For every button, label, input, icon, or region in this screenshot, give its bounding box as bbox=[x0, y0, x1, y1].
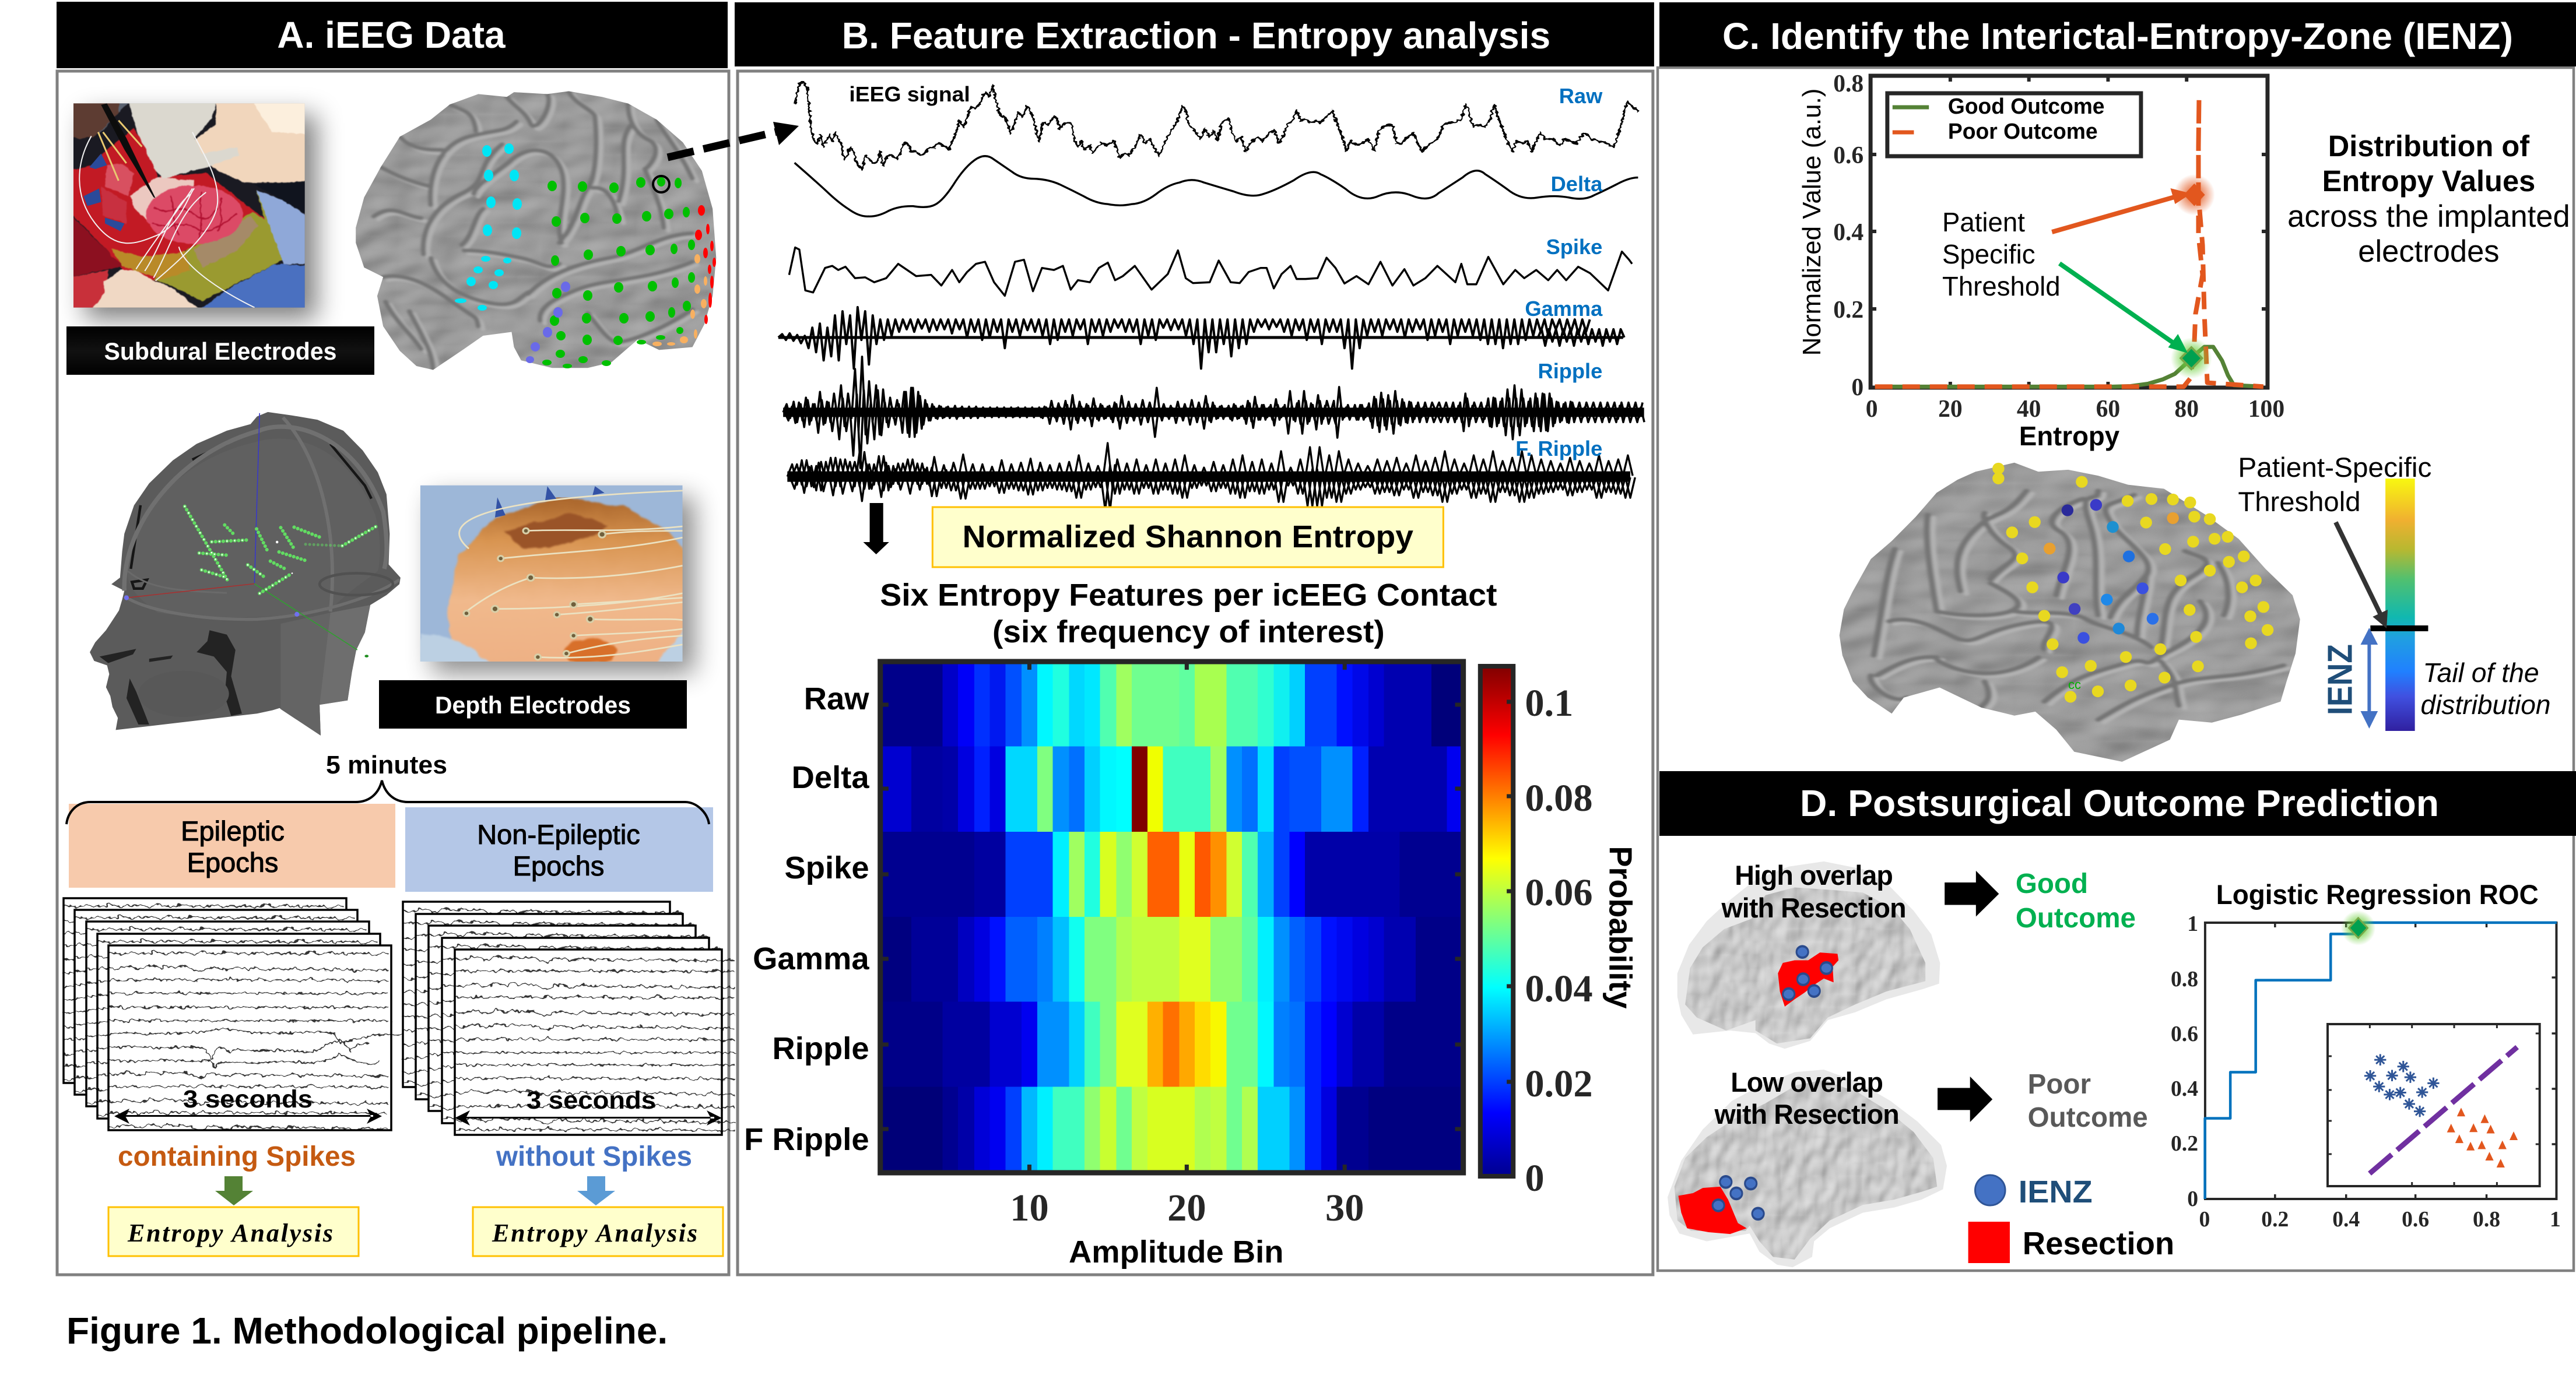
marker glow: operating point bbox=[2341, 910, 2375, 945]
ROC x labels: 1 bbox=[2550, 1207, 2561, 1232]
text: Poor Outcome bbox=[2028, 1069, 2148, 1133]
electrodes: yellow bbox=[1992, 463, 2273, 702]
x tick labels: 100 bbox=[2248, 396, 2284, 423]
box: Entropy Analysis right: Entropy Analysis bbox=[492, 1219, 697, 1247]
panel: C. Identify the IENZ bbox=[1659, 2, 2576, 762]
arrow: black down bbox=[864, 503, 889, 554]
text: Distribution of Entropy Values: Distribution of bbox=[2328, 129, 2529, 163]
text: Low overlap with Resection bbox=[1714, 1067, 1900, 1130]
legend: IENZ bbox=[1975, 1174, 2093, 1209]
box: Epileptic Epochs bbox=[69, 804, 395, 888]
legend: Resection: Resection bbox=[2023, 1225, 2174, 1261]
colorbar tick labels: 0.02 bbox=[1525, 1063, 1593, 1105]
text: containing Spikes: containing Spikes bbox=[118, 1141, 356, 1172]
text: without Spikes: without Spikes bbox=[496, 1141, 692, 1172]
text: Distribution of Entropy Values: across the implanted bbox=[2287, 199, 2570, 234]
trace: fast ripple bbox=[787, 443, 1635, 510]
ROC frame bbox=[2205, 923, 2556, 1199]
ROC x labels bbox=[2199, 1207, 2561, 1232]
panel D contents bbox=[1714, 860, 2561, 1263]
stacked spike epochs bbox=[64, 898, 404, 1130]
text: Poor Outcome: Outcome bbox=[2028, 1102, 2148, 1133]
legend: Poor Outcome bbox=[1948, 119, 2098, 144]
text: Probability: Probability bbox=[1602, 846, 1638, 1008]
arrow: blue down bbox=[577, 1176, 615, 1205]
label: Raw: Raw bbox=[1559, 84, 1603, 108]
resection: red frontal bbox=[1678, 1187, 1747, 1234]
ROC curve bbox=[2205, 923, 2557, 1199]
text: 5 minutes: 5 minutes bbox=[326, 751, 447, 779]
x tick labels bbox=[1866, 396, 2284, 423]
marker: good threshold bbox=[2181, 347, 2202, 369]
ROC y labels: 0 bbox=[2187, 1187, 2198, 1211]
heatmap x tick labels: 20 bbox=[1167, 1187, 1206, 1229]
axis label: Normalized Value: Normalized Value (a.u.) bbox=[1798, 89, 1826, 356]
box: Entropy Analysis left bbox=[108, 1207, 359, 1256]
brain with subdural electrodes bbox=[356, 92, 716, 373]
chart: entropy distribution bbox=[1798, 71, 2284, 451]
colorbar tick labels: 0.04 bbox=[1525, 968, 1593, 1010]
heatmap row labels: Spike bbox=[785, 850, 869, 885]
heat row: F Ripple bbox=[880, 1087, 1463, 1170]
text: Patient Specific Threshold: Threshold bbox=[1942, 272, 2061, 301]
ROC y labels bbox=[2171, 912, 2198, 1211]
heatmap frame bbox=[880, 662, 1464, 1173]
y tick labels: 0.4 bbox=[1833, 219, 1863, 246]
panel: B. Feature Extraction bbox=[735, 2, 1654, 1275]
arrow: 3 second span left bbox=[114, 1109, 382, 1124]
caption: Figure 1. Methodological pipeline. bbox=[66, 1310, 668, 1352]
label: Depth Electrodes bbox=[379, 680, 687, 729]
signal traces bbox=[778, 82, 1644, 510]
ROC x labels: 0.2 bbox=[2261, 1207, 2289, 1232]
x tick labels: 60 bbox=[2096, 396, 2120, 423]
text: Patient Specific Threshold: Specific bbox=[1942, 240, 2035, 269]
label: Subdural Electrodes: Subdural Electrodes bbox=[104, 337, 337, 365]
box: Normalized Shannon Entropy: Normalized Shannon Entropy bbox=[963, 519, 1413, 554]
text: High overlap with Resection: with Resection bbox=[1721, 893, 1907, 923]
separating line bbox=[2370, 1047, 2517, 1173]
heatmap bbox=[880, 662, 1464, 1173]
heat row: Raw bbox=[880, 664, 1463, 746]
arrow: IENZ range bbox=[2360, 628, 2378, 729]
panel: A. iEEG Data bbox=[57, 2, 735, 1275]
resection: red bbox=[1778, 952, 1838, 1007]
brain: high overlap bbox=[1677, 861, 1940, 1049]
y tick labels: 0.2 bbox=[1833, 297, 1863, 323]
electrodes: red bbox=[695, 205, 716, 324]
text: Good Outcome: Outcome bbox=[2016, 903, 2136, 934]
curve: poor outcome bbox=[1875, 98, 2263, 386]
IENZ contacts bbox=[1783, 946, 1832, 1000]
text: Patient-Specific Threshold: Patient-Specific bbox=[2238, 452, 2431, 483]
heatmap x tick labels bbox=[1010, 1187, 1364, 1229]
colour scale bbox=[2385, 479, 2415, 731]
label: Delta: Delta bbox=[1551, 172, 1603, 196]
colorbar bbox=[1480, 666, 1593, 1200]
ROC x labels: 0.4 bbox=[2332, 1207, 2360, 1232]
electrodes: violet bbox=[526, 282, 570, 363]
arrow: threshold pointer bbox=[2336, 522, 2388, 628]
x tick labels: 20 bbox=[1938, 396, 1963, 423]
heat row: Gamma bbox=[880, 917, 1463, 1002]
ROC y labels: 1 bbox=[2187, 912, 2198, 936]
text: Low overlap with Resection: with Resection bbox=[1714, 1099, 1900, 1130]
neck tissue bbox=[281, 613, 331, 736]
arrow: green down bbox=[215, 1176, 253, 1205]
box: Non-Epileptic Epochs bbox=[405, 807, 713, 892]
heading: A. iEEG Data: A. iEEG Data bbox=[277, 14, 506, 56]
text: Patient-Specific Threshold bbox=[2238, 452, 2431, 517]
text: Logistic Regression ROC: Logistic Regression ROC bbox=[2216, 880, 2539, 910]
ROC y labels: 0.6 bbox=[2171, 1022, 2198, 1046]
text: six frequency of interest: (six frequency of interest) bbox=[992, 614, 1385, 649]
x tick labels: 40 bbox=[2017, 396, 2041, 423]
arrow: to good outcome bbox=[1945, 871, 1999, 917]
heading: A. iEEG Data bbox=[57, 2, 728, 68]
text: Distribution of Entropy Values: electrodes bbox=[2358, 234, 2500, 269]
text: Distribution of Entropy Values: Entropy Values bbox=[2322, 164, 2535, 198]
arrow: dashed from brain contact to signal bbox=[668, 122, 799, 157]
stacked non-spike epochs bbox=[403, 902, 735, 1135]
colorbar tick labels: 0.08 bbox=[1525, 777, 1593, 820]
box: Normalized Shannon Entropy bbox=[932, 507, 1443, 567]
chart frame bbox=[1870, 76, 2268, 388]
box: Non-Epileptic Epochs: Non-Epileptic bbox=[477, 819, 640, 850]
marker glow: poor threshold bbox=[2174, 174, 2215, 216]
head outline bbox=[90, 412, 401, 736]
ROC x labels: 0.6 bbox=[2402, 1207, 2429, 1232]
trace: gamma bbox=[778, 307, 1624, 368]
label: Spike: Spike bbox=[1546, 235, 1602, 259]
text: iEEG signal: iEEG signal bbox=[849, 82, 970, 106]
trace: ripple bbox=[783, 357, 1644, 468]
electrodes: orange bbox=[652, 254, 707, 346]
text: 3 seconds right: 3 seconds bbox=[527, 1086, 656, 1114]
electrodes: blue IENZ bbox=[2057, 499, 2159, 643]
heat row: Delta bbox=[880, 746, 1463, 832]
marker: operating point bbox=[2349, 918, 2367, 938]
heatmap row labels: Ripple bbox=[772, 1031, 869, 1066]
trace: delta bbox=[795, 156, 1638, 216]
brain with entropy coloured electrodes bbox=[1840, 463, 2300, 762]
legend bbox=[1887, 93, 2141, 156]
scatter: stars bbox=[2364, 1054, 2439, 1117]
axis label: Entropy: Entropy bbox=[2019, 421, 2120, 451]
scatter: triangles bbox=[2447, 1107, 2518, 1167]
photo: subdural electrode implantation bbox=[66, 97, 317, 319]
marker glow: good threshold bbox=[2171, 337, 2212, 379]
electrodes: cyan bbox=[455, 143, 522, 311]
text: Good Outcome: Good bbox=[2016, 868, 2088, 899]
label: IENZ vertical: IENZ bbox=[2321, 644, 2360, 715]
panel A frame bbox=[57, 71, 729, 1275]
brain: low overlap bbox=[1668, 1070, 1947, 1267]
heat row: Spike bbox=[880, 832, 1463, 917]
text: Tail of the distribution bbox=[2421, 658, 2551, 720]
CT head with depth electrodes bbox=[90, 412, 401, 736]
heading: C. Identify: C. Identify the Interictal-Entropy-Zone (IENZ) bbox=[1722, 15, 2513, 57]
heatmap row labels: Delta bbox=[792, 760, 869, 795]
heat row: Ripple bbox=[880, 1002, 1463, 1087]
ROC y labels: 0.4 bbox=[2171, 1077, 2198, 1101]
text: Tail of the distribution: Tail of the bbox=[2423, 658, 2539, 688]
ROC y labels: 0.8 bbox=[2171, 967, 2198, 991]
arrow: orange to threshold bbox=[2052, 188, 2191, 232]
arrow: green to threshold bbox=[2059, 263, 2188, 353]
depth electrode contacts bbox=[185, 507, 377, 593]
colorbar tick labels: 0 bbox=[1525, 1157, 1545, 1200]
heatmap row labels: Gamma bbox=[753, 941, 869, 976]
brain cavity bbox=[128, 439, 380, 617]
box: Entropy Analysis left: Entropy Analysis bbox=[127, 1219, 333, 1247]
inset: classification scatter bbox=[2328, 1024, 2540, 1186]
text: Patient Specific Threshold: Patient bbox=[1942, 208, 2025, 237]
box: Entropy Analysis right bbox=[473, 1207, 723, 1256]
panel C contents bbox=[1798, 71, 2570, 731]
text: Amplitude Bin: Amplitude Bin bbox=[1069, 1235, 1283, 1269]
photo: depth electrode implantation bbox=[419, 486, 694, 673]
y tick labels bbox=[1833, 71, 1863, 401]
curve: good outcome bbox=[1875, 347, 2263, 386]
legend: Resection bbox=[1968, 1222, 2174, 1263]
panel: C and D frame bbox=[1658, 68, 2574, 1271]
y tick labels: 0.6 bbox=[1833, 142, 1863, 169]
label: Depth Electrodes: Depth Electrodes bbox=[435, 691, 631, 719]
text: High overlap with Resection bbox=[1721, 860, 1907, 923]
marker: poor threshold bbox=[2184, 184, 2205, 206]
x tick labels: 0 bbox=[1866, 396, 1878, 423]
colorbar tick labels: 0.06 bbox=[1525, 871, 1593, 914]
label: Ripple: Ripple bbox=[1538, 359, 1602, 383]
text: Poor Outcome: Poor bbox=[2028, 1069, 2091, 1100]
colorbar tick labels bbox=[1525, 682, 1593, 1200]
IENZ contacts bbox=[1712, 1176, 1764, 1219]
text: Low overlap with Resection: Low overlap bbox=[1731, 1067, 1883, 1098]
text: Six Entropy Features: Six Entropy Features per icEEG Contact bbox=[880, 578, 1497, 613]
legend: IENZ: IENZ bbox=[2019, 1174, 2093, 1209]
electrodes: green bbox=[542, 177, 695, 368]
threshold line bbox=[2370, 625, 2428, 631]
colorbar tick labels: 0.1 bbox=[1525, 682, 1573, 725]
trace: raw bbox=[795, 82, 1638, 170]
trace: spike bbox=[789, 248, 1632, 296]
box: Epileptic Epochs: Epileptic bbox=[181, 815, 285, 846]
coordinate axes bbox=[254, 413, 259, 583]
trace: gamma tail bbox=[1538, 329, 1624, 346]
label: Gamma: Gamma bbox=[1525, 297, 1603, 321]
text: Tail of the distribution: distribution bbox=[2421, 690, 2551, 720]
heading: B. Feature Extraction: B. Feature Extraction - Entropy analysis bbox=[842, 15, 1550, 57]
heatmap row labels: F Ripple bbox=[744, 1122, 869, 1157]
ROC x labels: 0.8 bbox=[2473, 1207, 2500, 1232]
text: Patient-Specific Threshold: Threshold bbox=[2238, 487, 2360, 517]
brace spanning both epoch types bbox=[66, 780, 709, 824]
legend: Good Outcome bbox=[1948, 94, 2104, 119]
ROC y labels: 0.2 bbox=[2171, 1131, 2198, 1156]
text: Distribution of Entropy Values bbox=[2287, 129, 2570, 269]
text: cc: cc bbox=[2068, 677, 2081, 692]
ROC x labels: 0 bbox=[2199, 1207, 2210, 1232]
y tick labels: 0.8 bbox=[1833, 71, 1863, 97]
panel B frame bbox=[738, 71, 1653, 1275]
box: Non-Epileptic Epochs: Epochs bbox=[513, 850, 604, 881]
text: Patient Specific Threshold bbox=[1942, 208, 2061, 301]
box: Epileptic Epochs: Epochs bbox=[187, 847, 278, 878]
text: Good Outcome bbox=[2016, 868, 2136, 934]
y tick labels: 0 bbox=[1851, 374, 1863, 401]
panel: D. Postsurgical Outcome Prediction bbox=[1659, 771, 2576, 1267]
heatmap row labels: Raw bbox=[804, 681, 869, 716]
text: 3 seconds left: 3 seconds bbox=[183, 1085, 313, 1113]
heading: D. Postsurgical: D. Postsurgical Outcome Prediction bbox=[1800, 782, 2439, 824]
text: High overlap with Resection: High overlap bbox=[1735, 860, 1893, 891]
heatmap x tick labels: 10 bbox=[1010, 1187, 1049, 1229]
heading: D. Postsurgical bbox=[1659, 771, 2576, 836]
chart: ROC bbox=[2171, 910, 2561, 1232]
heading: C. Identify bbox=[1659, 2, 2576, 66]
heatmap x tick labels: 30 bbox=[1325, 1187, 1364, 1229]
label: Subdural Electrodes bbox=[66, 326, 374, 375]
x tick labels: 80 bbox=[2174, 396, 2199, 423]
selected contact ring bbox=[653, 176, 669, 192]
airway dark regions bbox=[100, 630, 242, 725]
electrodes: orange bbox=[2044, 512, 2179, 554]
arrow: to poor outcome bbox=[1938, 1077, 1992, 1122]
label: F. Ripple: F. Ripple bbox=[1515, 437, 1602, 460]
arrow: 3 second span right bbox=[455, 1110, 722, 1126]
heading: B. Feature Extraction bbox=[735, 2, 1654, 66]
heatmap row labels bbox=[744, 681, 869, 1157]
